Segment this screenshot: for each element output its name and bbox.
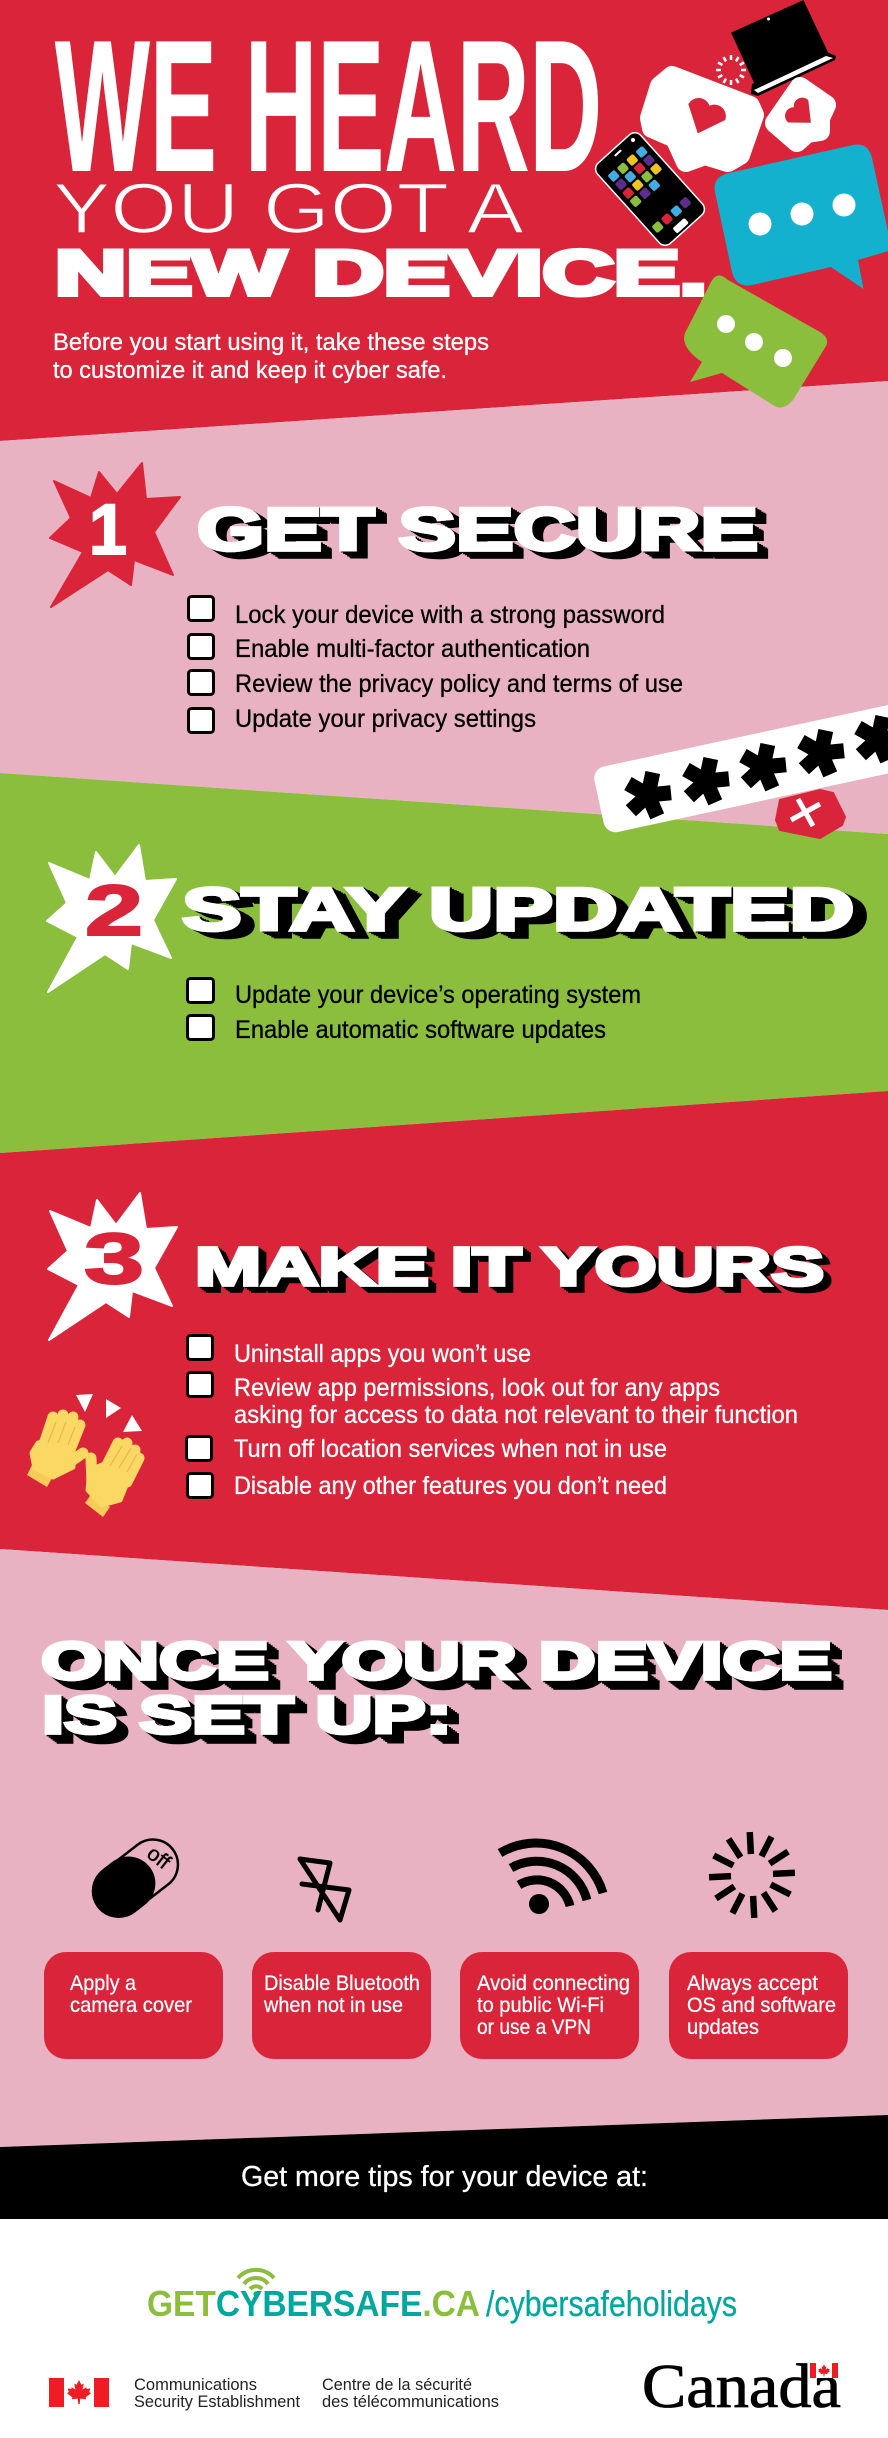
step number 2: 2 xyxy=(85,872,143,951)
call to action text: Get more tips for your device at: xyxy=(241,2161,648,2193)
icon: camera cover xyxy=(81,1828,189,1929)
signature: communications security establishment: Security Establishment xyxy=(134,2392,300,2411)
icon: wifi signal on logo xyxy=(238,2270,274,2296)
checklist: step 3: Review app permissions, look out for any apps xyxy=(234,1374,720,1402)
checklist: step 1: Lock your device with a strong password xyxy=(235,601,665,629)
panel: once your device is set up xyxy=(41,1632,848,2059)
checklist: step 3: Disable any other features you don’t need xyxy=(234,1472,667,1500)
icon: large heart bubble xyxy=(650,76,754,162)
intro text xyxy=(53,329,489,384)
panel: step 3 make it yours xyxy=(27,1193,824,1517)
heading: make it yours: MAKE IT YOURS xyxy=(195,1237,824,1297)
signature: centre de la securite: des télécommunications xyxy=(322,2392,499,2411)
url path: /cybersafeholidays xyxy=(486,2283,737,2324)
icon: password field xyxy=(592,693,888,838)
icon: wifi xyxy=(500,1843,603,1914)
card: updates xyxy=(669,1952,848,2059)
checklist: step 2 xyxy=(188,978,641,1044)
signature: communications security establishment xyxy=(134,2375,300,2411)
card: bluetooth: when not in use xyxy=(263,1994,403,2017)
card: public wi-fi: to public Wi-Fi xyxy=(477,1994,604,2017)
background: green section two band xyxy=(0,773,888,1153)
icon: small heart bubble xyxy=(775,87,826,142)
background: red header band xyxy=(0,0,888,441)
card: updates: OS and software xyxy=(687,1994,836,2017)
card: camera cover: Apply a xyxy=(70,1972,136,1995)
card: public wi-fi xyxy=(460,1952,639,2059)
step number 3: 3 xyxy=(84,1220,144,1299)
logo: canada flag xyxy=(49,2378,109,2407)
panel: step 2 stay updated xyxy=(47,845,854,1044)
icon: smartphone xyxy=(592,129,708,249)
checklist: step 3 xyxy=(186,1336,798,1500)
checklist: step 3: Uninstall apps you won’t use xyxy=(234,1340,531,1368)
logo: canada wordmark: Canada xyxy=(642,2353,841,2421)
checklist: step 1: Review the privacy policy and terms of use xyxy=(235,670,683,698)
background: pink section one band xyxy=(0,381,888,834)
icon: camera cover: off xyxy=(142,1842,175,1874)
panel: step 1 get secure xyxy=(50,463,888,838)
checklist: step 1: Update your privacy settings xyxy=(235,705,536,733)
icon: raised hands xyxy=(27,1394,142,1517)
icon: red starburst xyxy=(50,463,180,607)
icon: green chat bubble xyxy=(684,275,827,408)
heading: once your device: ONCE YOUR DEVICE xyxy=(41,1632,832,1691)
intro text: Before you start using it, take these steps xyxy=(53,329,489,356)
checklist: step 2: Update your device’s operating system xyxy=(235,981,641,1009)
heading: get secure: GET SECURE xyxy=(197,496,758,563)
panel: header xyxy=(53,1,888,408)
card: camera cover xyxy=(44,1952,223,2059)
icon: bluetooth xyxy=(300,1859,349,1920)
icon: laptop xyxy=(732,1,836,96)
checklist: step 3: asking for access to data not relevant to their function xyxy=(234,1401,798,1429)
icon: update spinner xyxy=(707,1830,797,1920)
title: new device: NEW DEVICE. xyxy=(55,238,707,308)
title: you got a: YOU GOT A xyxy=(53,170,525,249)
signature: centre de la securite: Centre de la sécurité xyxy=(322,2375,472,2394)
card: bluetooth xyxy=(252,1952,431,2059)
checklist: step 3: Turn off location services when not in use xyxy=(234,1435,667,1463)
card: camera cover: camera cover xyxy=(70,1994,192,2017)
icon: white starburst xyxy=(48,1193,177,1340)
panel: footer logos xyxy=(49,2270,841,2421)
intro text: to customize it and keep it cyber safe. xyxy=(53,357,447,384)
logo: getcybersafe.ca url: GETCYBERSAFE.CA xyxy=(147,2283,480,2324)
background: black tips band xyxy=(0,2115,888,2219)
icon: loading spinner small xyxy=(716,55,746,85)
card: public wi-fi: or use a VPN xyxy=(477,2016,591,2039)
signature: centre de la securite xyxy=(322,2375,499,2411)
card: updates: Always accept xyxy=(687,1972,818,1995)
checklist: step 2: Enable automatic software updates xyxy=(235,1016,606,1044)
background: red section three band xyxy=(0,1091,888,1610)
checklist: step 1: Enable multi-factor authentication xyxy=(235,635,590,663)
icon: white starburst xyxy=(47,845,176,992)
background: pink set-up band xyxy=(0,1549,888,2147)
card: bluetooth: Disable Bluetooth xyxy=(264,1972,420,1995)
checklist: step 1 xyxy=(188,596,683,733)
step number 1: 1 xyxy=(89,491,127,570)
icon: blue chat bubble xyxy=(715,145,888,289)
card: updates: updates xyxy=(687,2016,759,2039)
signature: communications security establishment: Communications xyxy=(134,2375,257,2394)
card: public wi-fi: Avoid connecting xyxy=(477,1972,630,1995)
heading: stay updated: STAY UPDATED xyxy=(182,876,854,943)
heading: is set up: IS SET UP: xyxy=(42,1686,452,1745)
